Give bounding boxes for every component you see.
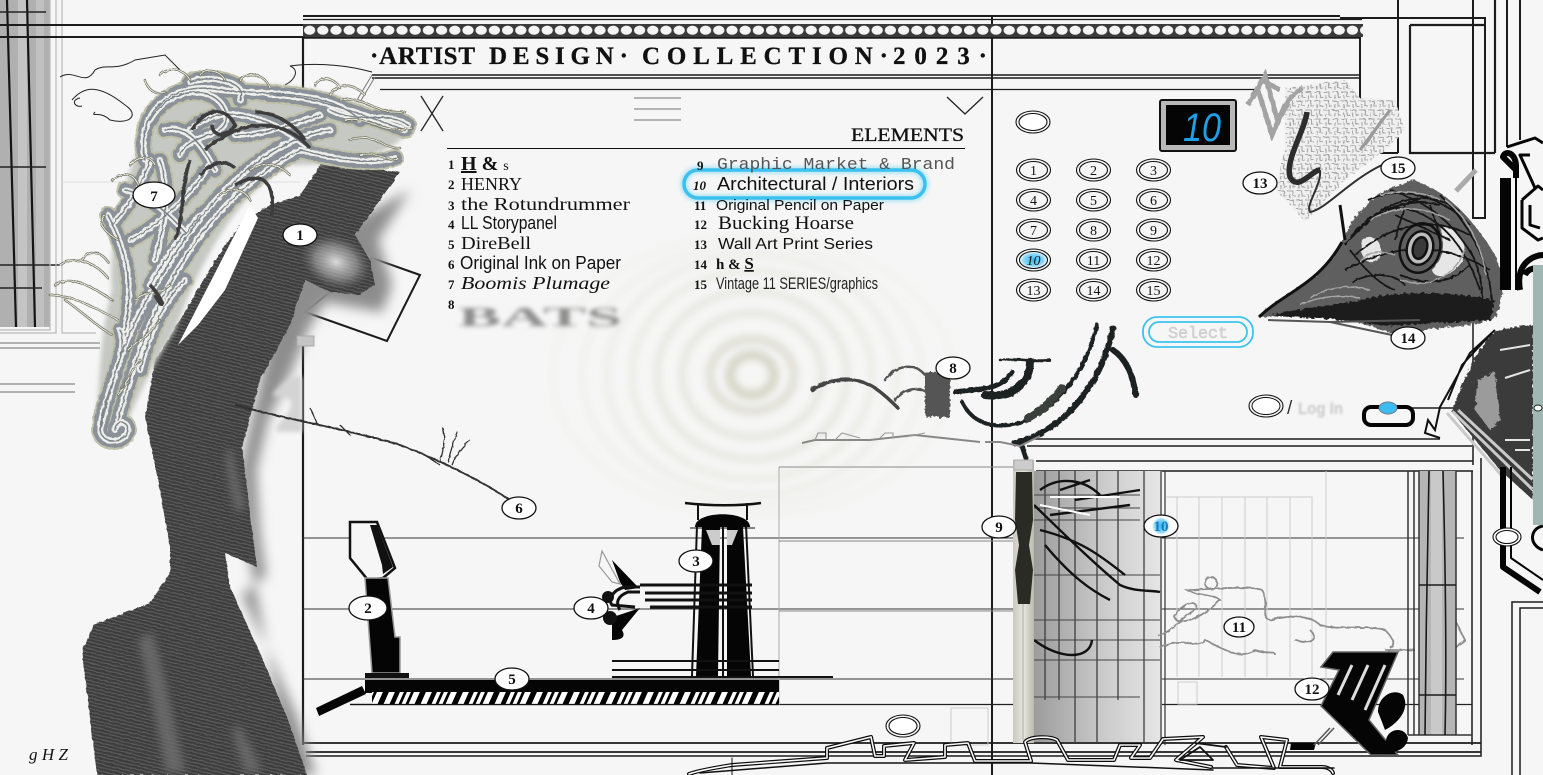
display: 10 bbox=[1183, 106, 1221, 150]
number keypad: 9 bbox=[1150, 224, 1157, 239]
ripple bbox=[552, 235, 952, 515]
number labels: 12 bbox=[1304, 682, 1320, 698]
number labels: 8 bbox=[949, 361, 957, 377]
legend list left: BATS bbox=[458, 302, 622, 332]
legend list left: the Rotundrummer bbox=[461, 194, 630, 214]
number keypad: 2 bbox=[1090, 164, 1097, 179]
number keypad: 15 bbox=[1146, 284, 1160, 299]
legend list left: 4 bbox=[448, 217, 455, 232]
legend list left: 8 bbox=[448, 297, 455, 312]
title: DESIGN· bbox=[489, 43, 628, 70]
figure 10: room drawing bbox=[1034, 471, 1165, 745]
legend list left: 3 bbox=[448, 198, 455, 213]
figure 8: dragon bbox=[802, 325, 1136, 458]
number keypad bbox=[1016, 159, 1170, 301]
figure 5: direbell bar bbox=[316, 680, 779, 716]
number labels: 9 bbox=[995, 520, 1003, 536]
figure 2: henry bbox=[350, 522, 409, 678]
number keypad: 7 bbox=[1030, 224, 1037, 239]
legend list right: 15 bbox=[694, 277, 708, 292]
legend list left: Original Ink on Paper bbox=[460, 253, 621, 273]
heading: elements: ELEMENTS bbox=[851, 125, 964, 146]
legend list left: H & s bbox=[461, 153, 509, 175]
small knob bbox=[297, 336, 314, 346]
title bbox=[370, 43, 987, 70]
title: 2023· bbox=[893, 43, 987, 70]
small marker bbox=[1534, 405, 1542, 411]
figure 11: pencil sketch bbox=[1158, 577, 1465, 655]
select button bbox=[1143, 317, 1253, 347]
legend list right: Vintage 11 SERIES/graphics bbox=[716, 274, 878, 293]
icon: menu bbox=[634, 98, 681, 120]
legend list right: 10 bbox=[693, 178, 706, 193]
number labels: 6 bbox=[515, 501, 523, 517]
number keypad: 1 bbox=[1030, 164, 1037, 179]
figure 3: rotundrummer bbox=[640, 503, 761, 676]
display bbox=[1160, 100, 1236, 151]
legend list right: Graphic Market & Brand bbox=[717, 156, 955, 175]
legend list left: HENRY bbox=[461, 174, 522, 194]
legend list left: LL Storypanel bbox=[461, 213, 557, 233]
number keypad: 13 bbox=[1026, 284, 1040, 299]
login: / bbox=[1287, 398, 1293, 419]
left window bbox=[0, 0, 300, 392]
number keypad: 5 bbox=[1090, 194, 1097, 209]
figure 4: storypanel bbox=[599, 551, 640, 640]
highlight ring bbox=[684, 170, 925, 198]
figure 14: bird head bbox=[1259, 180, 1502, 335]
faint grid bbox=[951, 471, 1326, 745]
figure 7: plumage bbox=[50, 55, 412, 445]
legend list left bbox=[448, 153, 630, 332]
figure 13: wall art scribble bbox=[1248, 75, 1476, 222]
number keypad: 10 bbox=[1026, 254, 1040, 269]
number labels: 15 bbox=[1390, 161, 1406, 177]
legend list right: Bucking Hoarse bbox=[718, 213, 854, 234]
signature: gHZ bbox=[29, 745, 69, 764]
login bbox=[1249, 395, 1343, 419]
figure 1: halftone silhouette bbox=[82, 163, 420, 775]
beaded band bbox=[303, 24, 1363, 37]
legend list left: Boomis Plumage bbox=[461, 273, 610, 293]
legend list left: 5 bbox=[448, 237, 455, 252]
number labels: 1 bbox=[296, 228, 304, 244]
number labels: 2 bbox=[364, 601, 372, 617]
legend list right: 11 bbox=[694, 198, 706, 213]
login: Log In bbox=[1298, 399, 1343, 418]
legend list left: 7 bbox=[448, 277, 455, 292]
legend list right: Original Pencil on Paper bbox=[716, 197, 884, 214]
legend list right: 13 bbox=[694, 237, 708, 252]
number labels: 3 bbox=[692, 554, 700, 570]
title: ·ARTIST bbox=[370, 43, 475, 70]
number labels: 10 bbox=[1154, 519, 1168, 535]
icon: close X bbox=[421, 96, 443, 131]
teal strip bbox=[1533, 265, 1543, 525]
number labels: 11 bbox=[1232, 620, 1246, 636]
base lines bbox=[612, 661, 833, 677]
figure: bird body bbox=[1425, 325, 1533, 500]
icon: chevron bbox=[947, 97, 983, 114]
number keypad: 14 bbox=[1086, 284, 1100, 299]
number labels: 14 bbox=[1400, 331, 1416, 347]
number keypad: 11 bbox=[1087, 254, 1100, 269]
figure 12: bucking hoarse bbox=[1290, 652, 1408, 755]
legend list right: Architectural / Interiors bbox=[717, 174, 914, 194]
number keypad: 6 bbox=[1150, 194, 1157, 209]
select button: Select bbox=[1168, 325, 1228, 344]
number keypad: 12 bbox=[1146, 254, 1160, 269]
window lower right bbox=[1408, 471, 1472, 735]
figure 9: column bbox=[1013, 460, 1034, 743]
number labels: 7 bbox=[150, 189, 158, 205]
legend list right: Wall Art Print Series bbox=[718, 236, 873, 253]
legend list left: 6 bbox=[448, 257, 455, 272]
legend list right: 14 bbox=[694, 257, 708, 272]
legend list right: h & S bbox=[716, 254, 754, 273]
bottom ornament bbox=[689, 737, 1334, 775]
number labels: 4 bbox=[587, 601, 595, 617]
blank button bbox=[1016, 111, 1050, 133]
oval bottom bbox=[886, 715, 920, 737]
number keypad: 8 bbox=[1090, 224, 1097, 239]
legend list left: DireBell bbox=[461, 233, 531, 253]
legend list right: 12 bbox=[694, 217, 707, 232]
toggle bbox=[1364, 402, 1413, 425]
legend list right: 9 bbox=[697, 158, 704, 173]
title: COLLECTION· bbox=[642, 43, 888, 70]
number labels bbox=[133, 157, 1425, 700]
legend list right bbox=[693, 156, 955, 293]
number labels: 5 bbox=[508, 672, 516, 688]
legend list left: 2 bbox=[448, 177, 454, 192]
small oval right bbox=[1493, 528, 1521, 546]
legend list left: 1 bbox=[448, 157, 454, 172]
number labels: 13 bbox=[1252, 176, 1268, 192]
right ornament bbox=[1500, 138, 1543, 592]
number keypad: 3 bbox=[1150, 164, 1157, 179]
figure 6: branch bbox=[235, 405, 510, 500]
number keypad: 4 bbox=[1030, 194, 1037, 209]
